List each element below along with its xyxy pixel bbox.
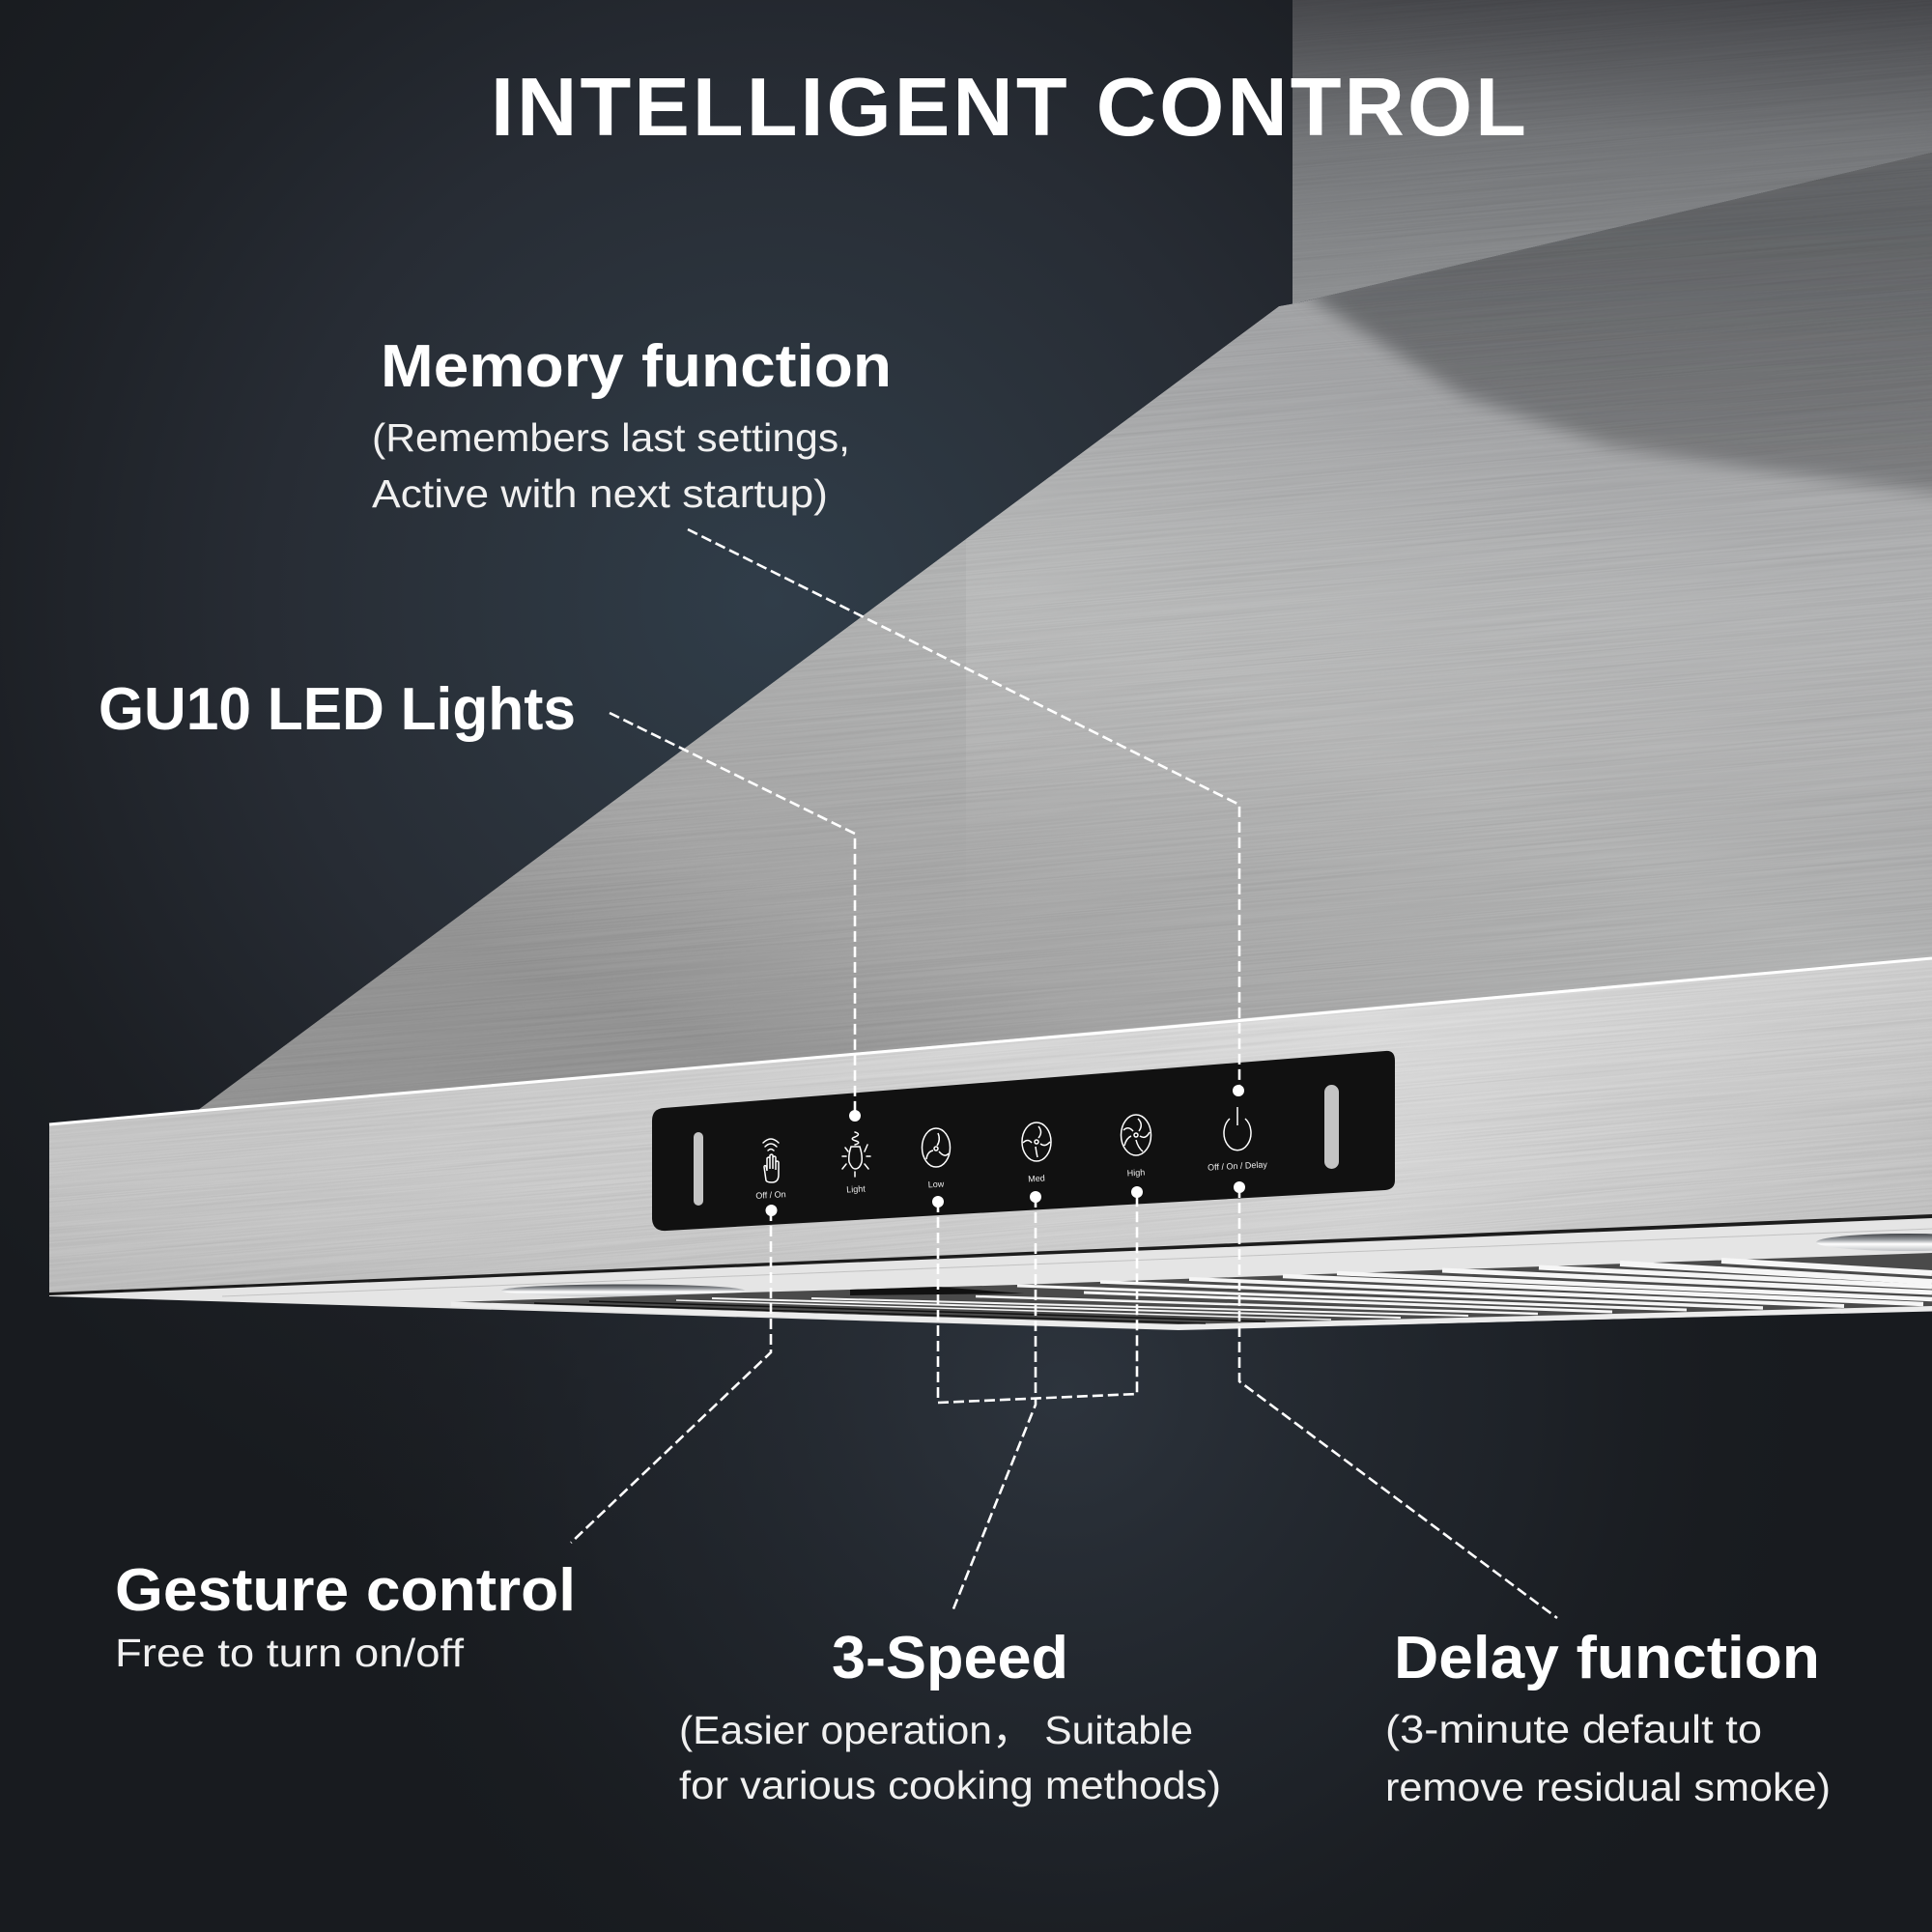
icon: power — [1224, 1107, 1251, 1151]
front panel bottom shadow line — [49, 1214, 1932, 1295]
description: 3-speed line 2: for various cooking methods) — [679, 1763, 1221, 1807]
right filter — [1816, 1234, 1932, 1251]
description: delay function line 1: (3-minute default to — [1385, 1707, 1762, 1751]
icon: light bulb — [842, 1132, 870, 1177]
icon: gesture — [763, 1139, 779, 1182]
canopy — [198, 135, 1932, 1110]
description: 3-speed line 1: (Easier operation， Suitable — [679, 1708, 1193, 1752]
description: memory function line 2: Active with next startup) — [372, 471, 828, 516]
front panel top highlight — [49, 958, 1932, 1124]
connector: 3-speed medium — [952, 1197, 1036, 1611]
label: high: High — [1126, 1168, 1146, 1178]
left filter — [501, 1285, 745, 1296]
connector: 3-speed bracket — [938, 1192, 1137, 1403]
heading: GU10 LED lights: GU10 LED Lights — [99, 676, 576, 743]
grease grille — [451, 1253, 1932, 1327]
heading: 3-speed: 3-Speed — [832, 1625, 1068, 1691]
connector: memory function — [688, 529, 1239, 1091]
brushed metal texture — [49, 153, 1932, 1287]
heading: gesture control: Gesture control — [115, 1557, 576, 1624]
icon: medium fan — [1022, 1122, 1051, 1161]
connector: delay function — [1239, 1187, 1557, 1618]
text block: memory function — [372, 333, 892, 516]
text block: gesture control — [115, 1557, 576, 1675]
heading: memory function: Memory function — [381, 333, 892, 400]
control panel — [652, 1051, 1395, 1231]
left slit — [694, 1132, 703, 1206]
chimney — [1293, 0, 1932, 304]
description: delay function line 2: remove residual smoke) — [1385, 1765, 1831, 1809]
front panel — [49, 957, 1932, 1293]
connector: GU10 LED lights — [610, 713, 855, 1116]
right slit — [1324, 1085, 1339, 1169]
title: INTELLIGENT CONTROL — [491, 62, 1529, 154]
icon: low fan — [922, 1128, 951, 1167]
callout dots — [765, 1085, 1245, 1216]
underside — [49, 1216, 1932, 1330]
label: off on: Off / On — [755, 1189, 786, 1201]
label: off on delay: Off / On / Delay — [1208, 1159, 1268, 1173]
panel face — [652, 1051, 1395, 1231]
text block: 3-speed — [679, 1625, 1221, 1807]
text block: delay function — [1385, 1625, 1831, 1809]
connector: gesture control — [571, 1210, 771, 1543]
label: low: Low — [927, 1179, 945, 1189]
description: memory function line 1: (Remembers last settings, — [372, 415, 850, 460]
label: med: Med — [1028, 1174, 1045, 1183]
label: light: Light — [846, 1183, 866, 1195]
callout connectors — [571, 529, 1557, 1618]
icon: high fan — [1121, 1115, 1151, 1155]
description: gesture control: Free to turn on/off — [115, 1631, 465, 1675]
heading: delay function: Delay function — [1394, 1625, 1820, 1691]
